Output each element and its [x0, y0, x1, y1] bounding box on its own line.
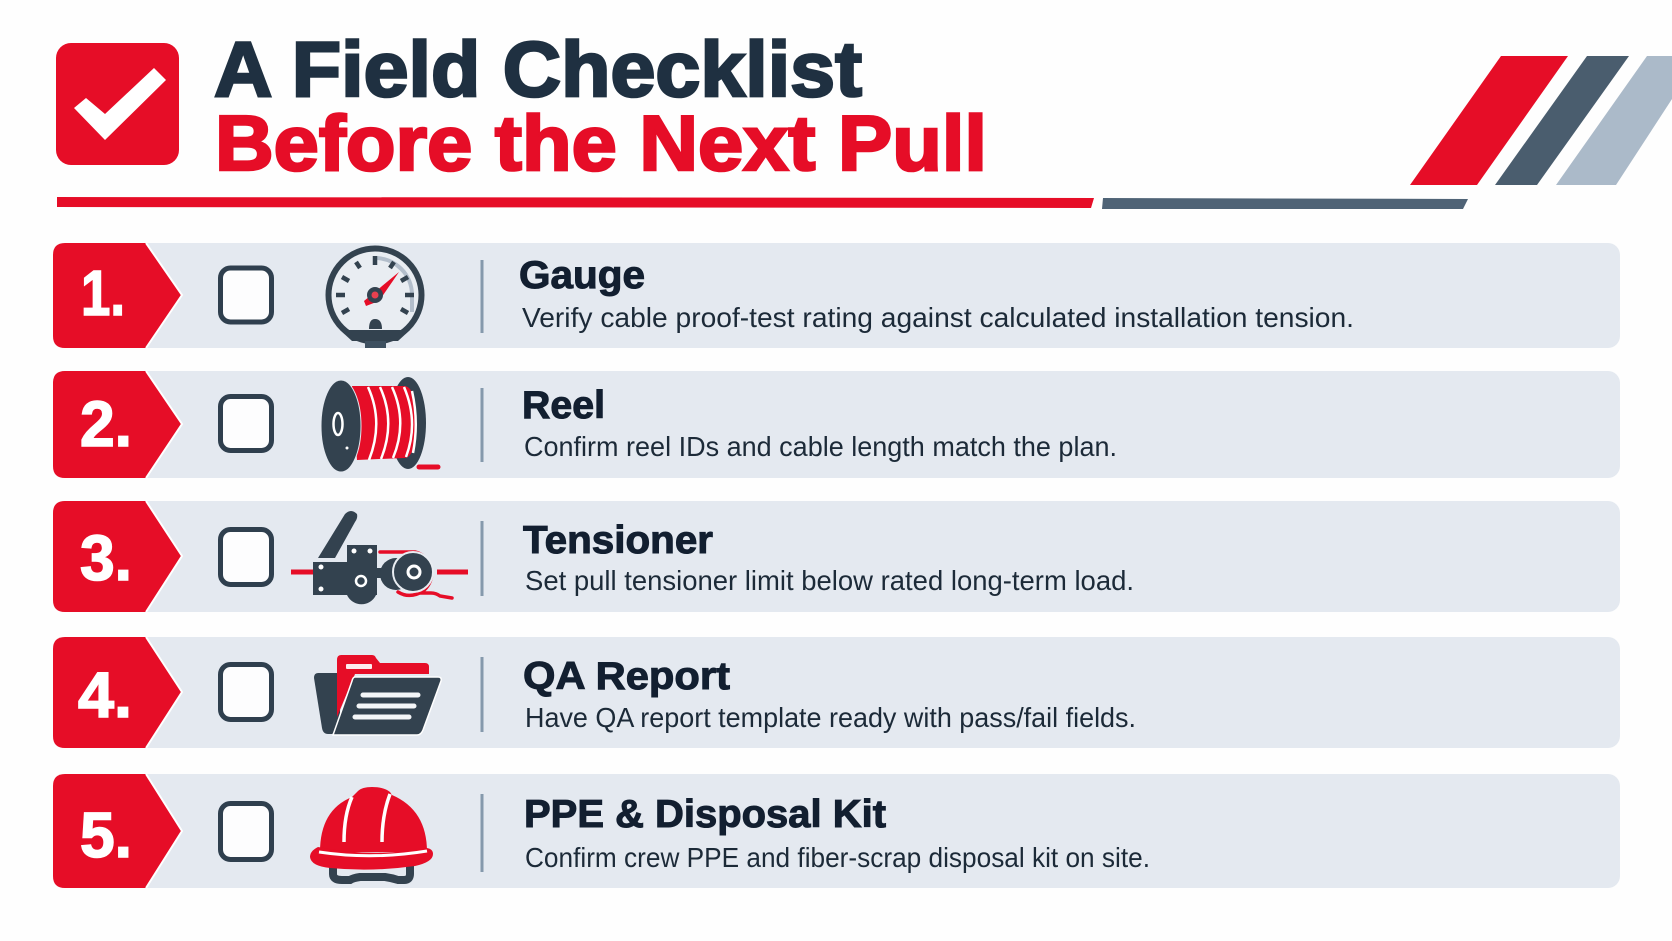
text: PPE and disposal kit: Confirm crew PPE and fiber-scrap disposal kit on site. [525, 842, 1150, 873]
panel: item 1 gauge [53, 243, 1620, 348]
number badge 5: 5. [80, 799, 132, 871]
icon: hard hat [310, 787, 433, 880]
slate header rule [1102, 198, 1468, 209]
number badge 5 [53, 774, 182, 888]
text: gauge: Gauge [519, 254, 645, 297]
title: A Field Checklist [214, 25, 862, 113]
text: gauge [519, 254, 1354, 333]
icon: tensioner [291, 511, 468, 604]
title [214, 25, 987, 187]
text: tensioner [523, 519, 1134, 596]
number badge 1: 1. [81, 257, 125, 329]
divider 1 [480, 260, 484, 333]
checkbox 5 [220, 804, 272, 860]
text: QA report: QA Report [523, 655, 730, 698]
panel: item 4 QA report [53, 637, 1620, 748]
divider 2 [480, 388, 484, 462]
icon: red checkmark tile [56, 43, 179, 165]
checkbox 4 [220, 664, 272, 720]
text: reel: Reel [522, 384, 605, 427]
panel: item 3 tensioner [53, 501, 1620, 612]
text: tensioner: Tensioner [523, 519, 713, 562]
number badge 3 [53, 501, 182, 612]
text: PPE and disposal kit [524, 793, 1150, 873]
divider 5 [480, 794, 484, 872]
text: reel: Confirm reel IDs and cable length match the plan. [524, 431, 1117, 462]
red header rule [57, 197, 1094, 208]
icon: cable reel [321, 377, 438, 472]
title: Before the Next Pull [215, 99, 987, 187]
text: PPE and disposal kit: PPE & Disposal Kit [524, 793, 886, 836]
icon: report folder [314, 655, 441, 735]
panel: item 2 reel [53, 371, 1620, 478]
number badge 4: 4. [78, 659, 132, 731]
checkbox 3 [220, 530, 272, 584]
number badge 2 [53, 371, 182, 478]
number badge 4 [53, 637, 182, 748]
checkbox 1 [220, 268, 272, 322]
text: QA report: Have QA report template ready with pass/fail fields. [525, 702, 1136, 733]
text: QA report [523, 655, 1136, 733]
number badge 1 [53, 243, 182, 348]
text: reel [522, 384, 1117, 462]
decorative stripes [1410, 56, 1672, 185]
number badge 2: 2. [80, 388, 132, 460]
icon: gauge [328, 248, 422, 348]
divider 4 [480, 657, 484, 732]
text: tensioner: Set pull tensioner limit below rated long-term load. [525, 565, 1134, 596]
text: gauge: Verify cable proof-test rating against calculated installation tension. [522, 302, 1354, 333]
divider 3 [480, 521, 484, 596]
checkbox 2 [220, 396, 272, 450]
panel: item 5 PPE and disposal kit [53, 774, 1620, 888]
header [56, 25, 1672, 209]
number badge 3: 3. [80, 522, 132, 594]
